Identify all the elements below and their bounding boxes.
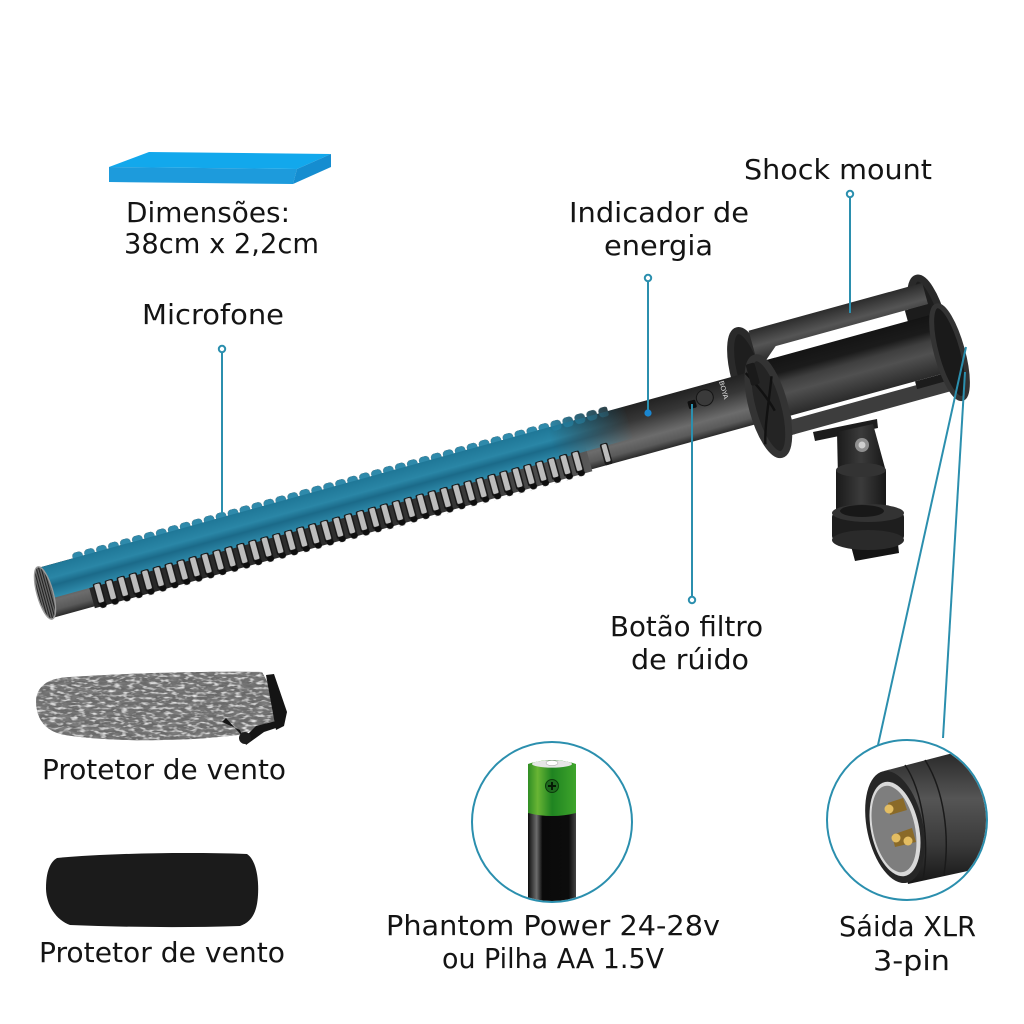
label: power indicator: Indicador de <box>569 197 749 229</box>
elastic cross <box>746 367 789 444</box>
slot backing <box>88 446 592 608</box>
blue tint band <box>36 406 633 600</box>
left cage join <box>761 358 796 438</box>
label: XLR output <box>839 911 976 977</box>
label: power indicator: energia <box>604 230 713 262</box>
XLR zoom lines <box>878 347 966 745</box>
noise filter switch <box>687 399 697 409</box>
shock mount back rings <box>722 274 956 425</box>
right front ring <box>924 302 975 402</box>
label: windscreen 1: Protetor de vento <box>42 754 286 786</box>
noise filter leader <box>689 404 695 603</box>
metal barrel <box>38 363 794 618</box>
label: power indicator <box>569 197 749 262</box>
microphone leader <box>219 346 225 516</box>
label: battery <box>386 910 720 975</box>
battery circle <box>472 742 632 908</box>
power indicator leader <box>644 275 652 417</box>
label: battery: Phantom Power 24-28v <box>386 910 720 942</box>
label: microphone: Microfone <box>142 299 284 331</box>
inner tube <box>767 315 945 418</box>
XLR connector circle <box>827 740 1000 900</box>
label: dimensions <box>124 197 319 260</box>
end slot <box>599 442 613 466</box>
lower posts <box>915 372 951 389</box>
shock mount leader <box>847 191 853 313</box>
label: noise filter button <box>610 611 763 676</box>
label: noise filter button: de rúido <box>631 644 749 676</box>
upper bar <box>749 283 931 363</box>
label: battery: ou Pilha AA 1.5V <box>442 943 664 975</box>
clip pad <box>746 362 760 386</box>
microphone body <box>34 377 754 620</box>
top ribs <box>71 406 609 563</box>
infographic canvas <box>34 152 988 976</box>
knob <box>695 388 715 408</box>
left front ring <box>740 354 797 459</box>
window side posts <box>905 304 934 326</box>
label: XLR output: 3-pin <box>873 945 950 977</box>
label: dimensions: Dimensões: <box>126 197 290 229</box>
lower bar <box>778 376 954 438</box>
callout lines <box>219 191 966 745</box>
label: shock mount: Shock mount <box>744 154 932 186</box>
label: XLR output: Sáida XLR <box>839 911 976 943</box>
furry windscreen <box>36 672 287 745</box>
brand: BOYA <box>717 380 730 401</box>
label: windscreen 2: Protetor de vento <box>39 937 285 969</box>
shock mount <box>732 277 976 459</box>
grille <box>30 565 60 621</box>
foam windscreen <box>46 853 258 927</box>
label: noise filter button: Botão filtro <box>610 611 763 643</box>
label: dimensions: 38cm x 2,2cm <box>124 228 319 260</box>
icon: blue dimensions slab <box>109 152 331 184</box>
bottom slots <box>92 449 589 609</box>
microphone mount foot <box>813 419 904 561</box>
